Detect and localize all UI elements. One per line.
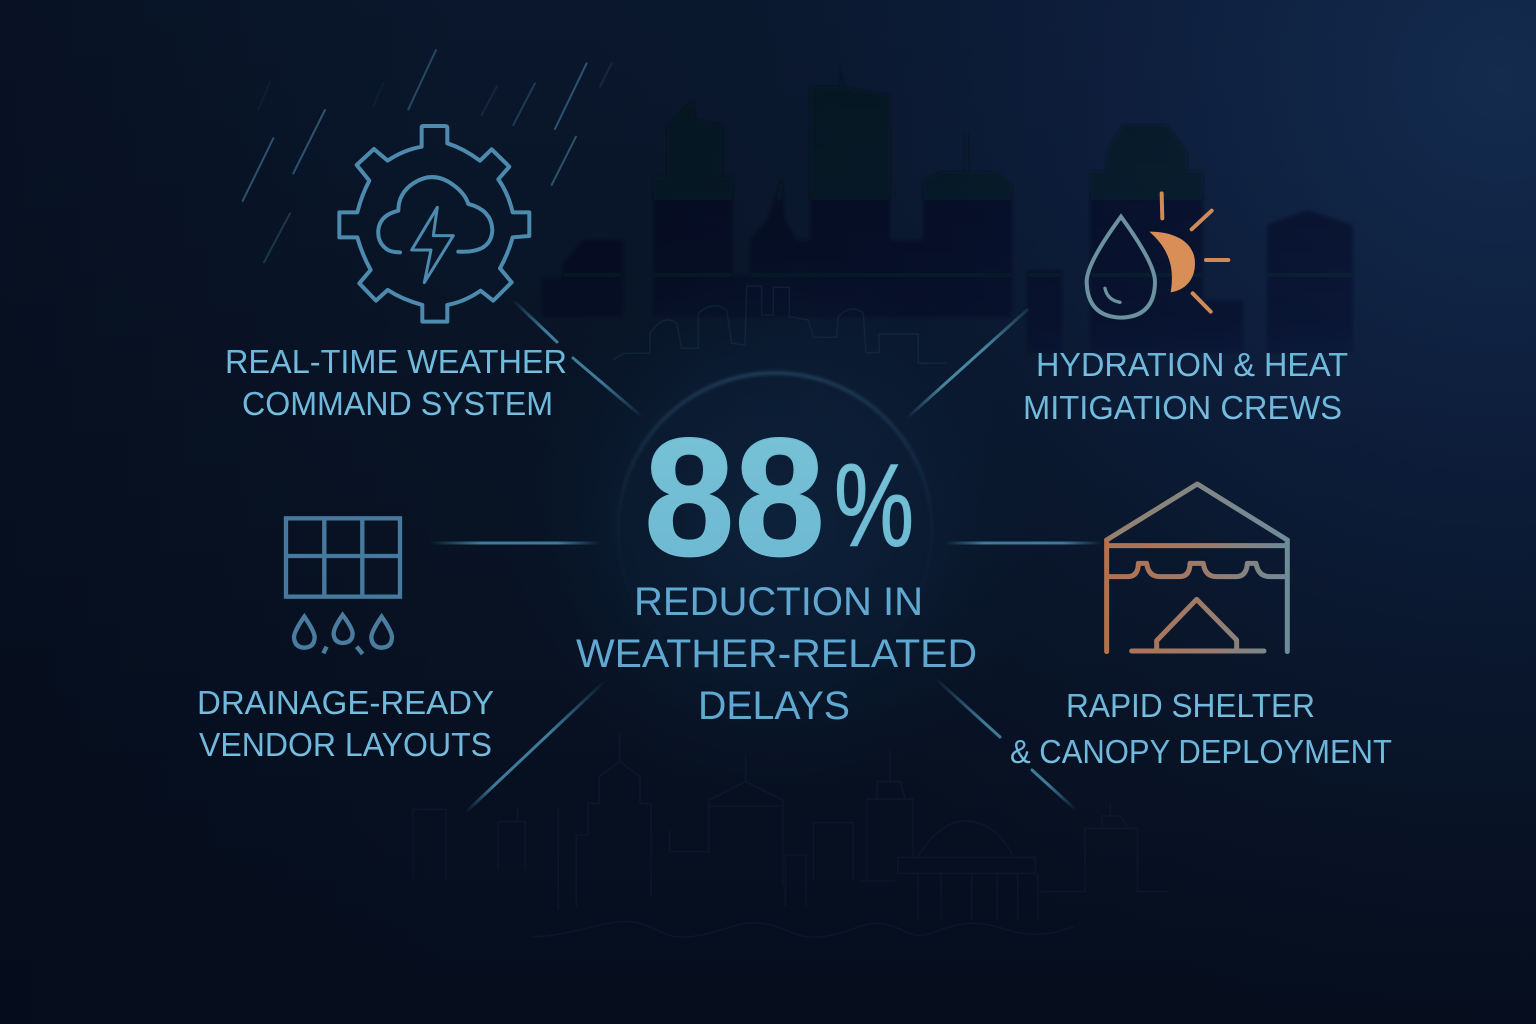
dark city skyline silhouette, centre — [542, 60, 1353, 353]
skyline outline, bottom — [413, 733, 1168, 937]
label: drainage-ready vendor layouts — [197, 684, 494, 763]
label: rapid shelter and canopy deployment — [1010, 687, 1392, 770]
icon: water drop and sun — [1087, 193, 1228, 318]
label: drainage-ready vendor layouts: VENDOR LAYOUTS — [199, 726, 492, 763]
rain streaks — [243, 50, 612, 262]
central statistic: 88 percent: 88 — [644, 403, 825, 591]
label: hydration and heat mitigation crews — [1023, 346, 1348, 426]
central caption: reduction in weather-related delays: REDUCTION IN — [634, 580, 923, 624]
central statistic: 88 percent — [644, 403, 914, 591]
label: real-time weather command system: REAL-TIME WEATHER — [225, 343, 567, 380]
icon: canopy shelter tent — [1107, 484, 1287, 652]
label: rapid shelter and canopy deployment: RAPID SHELTER — [1066, 687, 1315, 724]
label: hydration and heat mitigation crews: MITIGATION CREWS — [1023, 389, 1342, 426]
icon: drainage grid with drops — [286, 518, 400, 654]
icon: gear with storm cloud — [339, 126, 529, 322]
skyline outline, top — [613, 286, 947, 363]
central caption: reduction in weather-related delays: WEATHER-RELATED — [576, 632, 977, 676]
label: hydration and heat mitigation crews: HYDRATION & HEAT — [1036, 346, 1348, 383]
central statistic: 88 percent: % — [834, 440, 914, 572]
label: real-time weather command system: COMMAND SYSTEM — [242, 385, 553, 422]
connector lines — [430, 302, 1102, 812]
label: rapid shelter and canopy deployment: & CANOPY DEPLOYMENT — [1010, 733, 1392, 770]
label: drainage-ready vendor layouts: DRAINAGE-READY — [197, 684, 494, 721]
central caption: reduction in weather-related delays — [576, 580, 977, 728]
central glow halo — [505, 255, 1045, 795]
label: real-time weather command system — [225, 343, 567, 422]
central caption: reduction in weather-related delays: DELAYS — [698, 684, 850, 728]
